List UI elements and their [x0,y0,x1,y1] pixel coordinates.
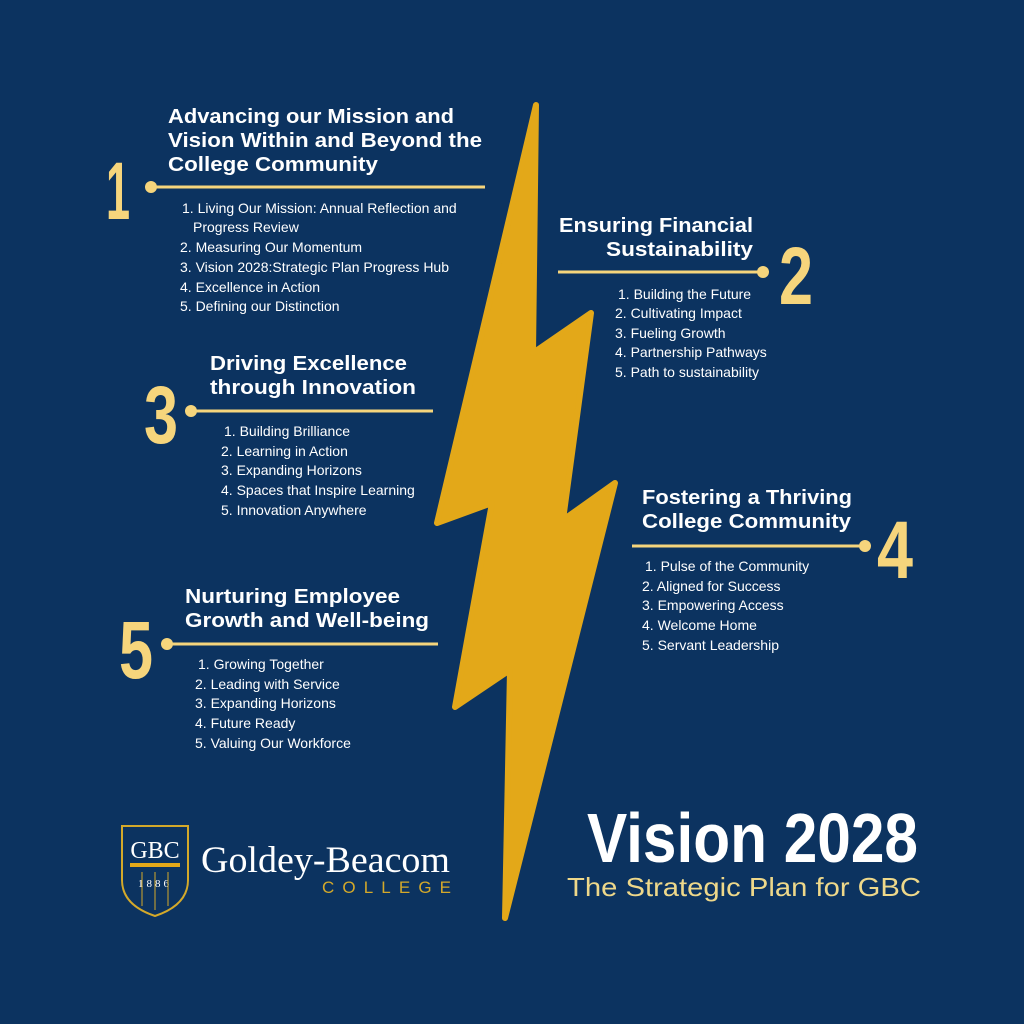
list 3: 2. Learning in Action [221,443,348,459]
logo [122,826,451,916]
list 4: 1. Pulse of the Community [645,558,809,574]
connector 4 [632,540,871,552]
list 1: 4. Excellence in Action [180,279,320,295]
connector 3 [185,405,433,417]
section 3 [144,353,433,518]
heading 2: Sustainability [606,239,754,261]
number 3: 3 [144,370,178,461]
list 1: Progress Review [193,219,300,235]
heading 3: through Innovation [210,377,416,399]
list 1: 3. Vision 2028:Strategic Plan Progress Hub [180,259,449,275]
list 1: 1. Living Our Mission: Annual Reflection and [182,200,457,216]
heading 3: Driving Excellence [210,353,407,375]
title [567,799,921,902]
logo wordmark: Goldey-Beacom [201,840,450,881]
list 5: 5. Valuing Our Workforce [195,735,351,751]
connector 1 [145,181,485,193]
list 2: 3. Fueling Growth [615,325,726,341]
icon: shield crest: GBC [130,838,180,864]
list 4: 2. Aligned for Success [642,578,781,594]
list 3: 5. Innovation Anywhere [221,502,367,518]
list 2: 1. Building the Future [618,286,751,302]
title: Vision 2028 [587,799,918,877]
heading 5: Nurturing Employee [185,586,400,608]
connector 2 [558,266,769,278]
list 3: 4. Spaces that Inspire Learning [221,482,415,498]
heading 1: College Community [168,154,379,176]
list 5: 4. Future Ready [195,715,295,731]
heading 2: Ensuring Financial [559,215,753,237]
list 2: 5. Path to sustainability [615,364,759,380]
heading 4: College Community [642,511,852,533]
logo: COLLEGE [322,878,451,897]
list 2: 4. Partnership Pathways [615,344,767,360]
section 2 [558,215,813,380]
icon: shield crest: 1886 [138,878,172,890]
list 5: 3. Expanding Horizons [195,695,336,711]
icon: shield crest [122,826,188,916]
section 5 [119,586,438,751]
lightning bolt [437,105,615,918]
number 5: 5 [119,605,153,696]
heading 1: Vision Within and Beyond the [168,130,482,152]
heading 5: Growth and Well-being [185,610,429,632]
list 4: 5. Servant Leadership [642,637,779,653]
section 1 [106,106,485,314]
connector 5 [161,638,438,650]
list 3: 3. Expanding Horizons [221,462,362,478]
list 5: 2. Leading with Service [195,676,340,692]
list 1: 5. Defining our Distinction [180,298,340,314]
section 4 [632,487,913,653]
list 1: 2. Measuring Our Momentum [180,239,362,255]
heading 1: Advancing our Mission and [168,106,454,128]
list 5: 1. Growing Together [198,656,324,672]
list 4: 3. Empowering Access [642,597,784,613]
number 4: 4 [877,505,913,596]
list 2: 2. Cultivating Impact [615,305,742,321]
number 2: 2 [779,231,813,322]
list 3: 1. Building Brilliance [224,423,350,439]
number 1: 1 [106,146,130,237]
heading 4: Fostering a Thriving [642,487,852,509]
list 4: 4. Welcome Home [642,617,757,633]
subtitle: The Strategic Plan for GBC [567,872,921,902]
